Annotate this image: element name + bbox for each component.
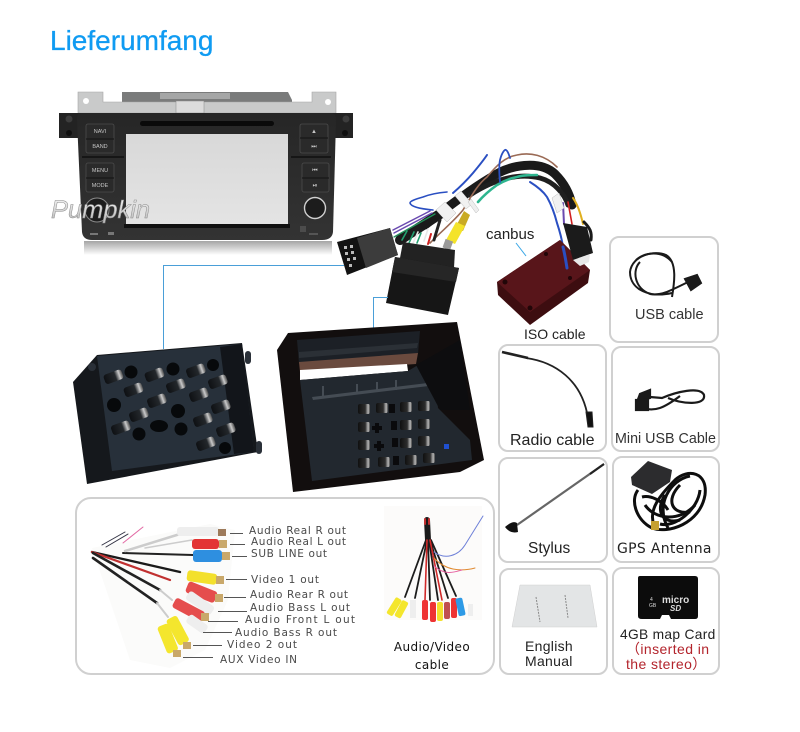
left buttons: NAVI [94,129,107,135]
icon: microSD card [638,576,698,619]
English manual label: English [525,638,573,654]
left buttons: MENU [92,168,108,174]
canbus side connector [563,223,593,268]
radio cable label: Radio cable [510,432,595,449]
mini USB cable label: Mini USB Cable [615,431,716,447]
small A/V cable photo [384,506,483,622]
USB cable label: USB cable [635,307,704,323]
RCA output labels: AUX Video IN [220,654,297,666]
canbus box [497,240,590,325]
RCA output labels: Audio Rear R out [250,589,348,601]
RCA output labels: Audio Real R out [249,525,346,537]
icon: radio cable [502,352,593,427]
right buttons [300,124,329,192]
right buttons: ⏮ [312,168,318,174]
panel: map card [613,568,719,674]
RCA output labels: Video 1 out [251,574,319,586]
map card note: （inserted in [626,641,709,657]
left buttons: MODE [92,183,109,189]
panel: audio/video cables [76,498,494,674]
RCA leader lines [183,534,247,658]
audio/video cable label: Audio/Video [394,640,470,654]
quadlock connector housing [277,322,484,492]
watermark: Pumpkin [51,196,150,224]
panel: stylus [499,458,607,562]
panel: radio cable [499,345,606,451]
icon: microSD card: GB [649,603,657,609]
icon: microSD card: SD [670,604,681,613]
left buttons: BAND [92,144,108,150]
RCA cable bundle photo [92,524,235,668]
stylus label: Stylus [528,540,570,557]
panel: USB cable [610,237,718,342]
wiring harness [393,150,591,247]
canbus label: canbus [486,226,534,243]
quadlock connector [386,242,459,315]
RCA output labels: Audio Bass L out [250,602,350,614]
icon: GPS antenna [631,461,705,530]
small round connector [337,228,398,275]
icon: manual booklet [512,585,597,627]
ISO cable label: ISO cable [524,326,586,342]
RCA output labels [220,525,355,666]
top metal bracket [78,92,336,113]
title: Lieferumfang [50,25,213,56]
map card note: the stereo） [626,656,707,672]
icon: stylus [505,464,604,532]
icon: mini USB cable [636,390,704,410]
left buttons [86,124,114,192]
RCA output labels: Audio Real L out [251,536,346,548]
round 17-pin connector housing [73,343,262,484]
panel: GPS antenna [613,457,719,562]
connector lines [164,266,388,349]
faceplate [59,113,353,240]
RCA output labels: Audio Front L out [245,614,355,626]
knobs [85,198,326,235]
English manual label: Manual [525,653,573,669]
reflection [84,241,332,255]
RCA output labels: Video 2 out [227,639,297,651]
RCA output labels: SUB LINE out [251,548,327,560]
canbus pointer [516,243,526,256]
map card label: 4GB map Card [620,627,716,642]
right buttons: ▲ [311,129,317,135]
right buttons: ⏭ [311,144,317,150]
wire labels and yellow RCA plug [436,191,564,250]
panel: English manual [500,569,607,674]
icon: microSD card: 4 [650,597,653,603]
icon: USB cable [630,253,701,297]
panel: mini USB cable [612,347,719,451]
icon: microSD card: micro [662,595,689,606]
GPS antenna label: GPS Antenna [617,541,712,557]
right buttons: ⏯ [313,183,318,189]
RCA output labels: Audio Bass R out [235,627,337,639]
head unit [51,92,353,255]
audio/video cable label: cable [415,658,449,672]
screen [126,134,288,224]
